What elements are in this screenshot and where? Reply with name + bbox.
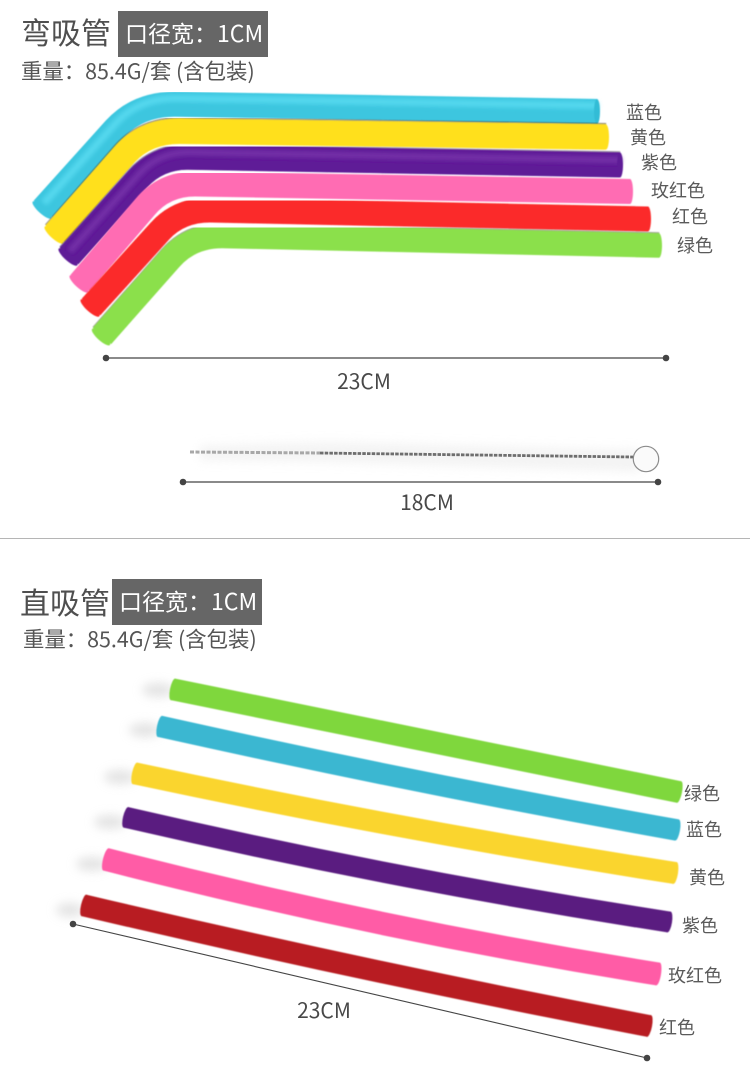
measure: 23CM straight — [70, 921, 650, 1061]
bent straw: yellow — [42, 124, 609, 246]
title: bent straw: 弯吸管 — [21, 9, 111, 53]
straight straw: purple — [121, 806, 674, 933]
weight text: 重量：85.4G/套 (含包装) — [23, 623, 257, 654]
badge: bore width — [112, 579, 262, 625]
colour labels: bent straws: 紫色 — [641, 149, 677, 175]
colour labels: straight straws — [659, 780, 725, 1040]
colour labels: bent straws: 黄色 — [630, 124, 666, 150]
measure: 23CM straight: 23CM — [297, 995, 351, 1025]
colour labels: bent straws: 蓝色 — [626, 99, 662, 125]
measure: 18CM brush: 18CM — [400, 487, 454, 517]
measure: 18CM brush — [180, 479, 661, 517]
title: straight straw: 直吸管 — [20, 579, 110, 623]
panel: straight straws — [20, 579, 725, 1061]
bent straw: blue — [30, 98, 600, 221]
colour labels: straight straws: 绿色 — [684, 780, 720, 806]
colour labels: straight straws: 玫红色 — [668, 962, 722, 988]
colour labels: bent straws: 绿色 — [677, 232, 713, 258]
straight straw: blue — [155, 715, 682, 841]
measure: 23CM bent: 23CM — [337, 366, 391, 396]
colour labels: straight straws: 黄色 — [689, 864, 725, 890]
badge: bore width: 口径宽：1CM — [125, 15, 263, 49]
bent straw: red — [78, 206, 651, 319]
panel: bent straws — [21, 9, 713, 517]
colour labels: bent straws: 玫红色 — [651, 177, 705, 203]
straight straw: yellow — [130, 762, 680, 884]
colour labels: straight straws: 蓝色 — [686, 816, 722, 842]
badge: bore width — [118, 11, 268, 57]
bent straw: green — [90, 233, 662, 348]
straight straw: pink — [100, 848, 663, 986]
soft shadows behind straw ends — [56, 683, 174, 917]
cleaning brush — [190, 442, 659, 472]
measure: 23CM bent — [103, 355, 669, 396]
straight straw: red — [79, 894, 654, 1037]
colour labels: straight straws: 红色 — [659, 1014, 695, 1040]
bent straw: purple — [56, 152, 623, 268]
colour labels: straight straws: 紫色 — [682, 912, 718, 938]
badge: bore width: 口径宽：1CM — [119, 583, 257, 617]
bent straw: pink — [67, 179, 633, 295]
colour labels: bent straws — [626, 99, 713, 258]
colour labels: bent straws: 红色 — [672, 203, 708, 229]
straight straw: green — [168, 678, 684, 803]
weight text: 重量：85.4G/套 (含包装) — [21, 55, 255, 86]
